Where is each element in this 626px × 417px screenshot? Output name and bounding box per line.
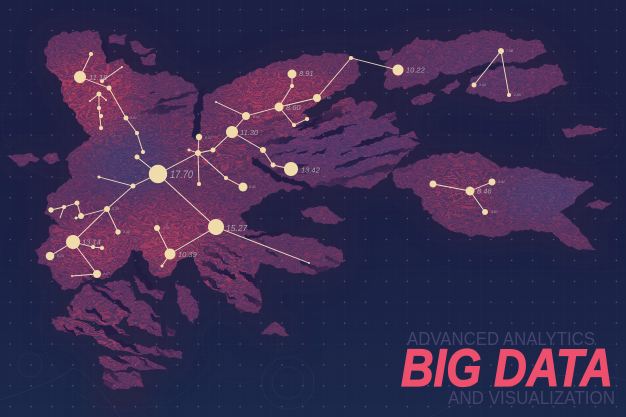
node value labels: 13.14 (82, 238, 101, 246)
connecting lines (50, 51, 509, 276)
carved inlets: southeastern lobes (170, 232, 340, 312)
node circles (46, 48, 511, 278)
subtitle: and visualization: AND VISUALIZATION (448, 387, 615, 408)
node value labels: 6.21 (205, 136, 212, 140)
node value labels: 7.57 (103, 272, 111, 276)
node value labels: 8.60 (286, 103, 301, 112)
node value labels: 8.46 (477, 186, 492, 196)
title block (401, 328, 615, 408)
node value labels: 17.70 (170, 169, 194, 181)
node value labels: 5.35 (112, 207, 119, 211)
carved inlets: middle and north (140, 90, 416, 194)
subtitle: advanced analytics: ADVANCED ANALYTICS (407, 328, 595, 349)
node value labels: 8.91 (299, 69, 314, 78)
node value labels: 10.22 (406, 66, 426, 74)
node value labels: 10.39 (178, 250, 198, 259)
node value labels: 4.87 (491, 210, 499, 214)
node value labels: 3.44 (479, 83, 486, 87)
node value labels: 11.18 (89, 73, 108, 82)
node value labels: 5.52 (130, 116, 137, 120)
node value labels: 7.98 (506, 49, 513, 53)
carved inlets: southwestern lobes (52, 255, 176, 388)
node value labels: 6.92 (498, 180, 505, 184)
node value labels: 4.48 (123, 230, 130, 234)
node value labels: 13.42 (301, 166, 321, 174)
node value labels: 15.27 (226, 223, 248, 233)
network of data nodes (46, 48, 521, 278)
node value labels: 3.25 (163, 226, 170, 230)
node value labels (57, 49, 521, 276)
node value labels: 11.30 (240, 128, 259, 137)
node value labels: 8.41 (249, 185, 256, 189)
node value labels: 2.99 (252, 115, 260, 119)
node value labels: 8.24 (57, 254, 64, 258)
fjords (104, 40, 500, 285)
node value labels: 7.65 (324, 96, 331, 100)
node value labels: 2.66 (513, 93, 521, 97)
